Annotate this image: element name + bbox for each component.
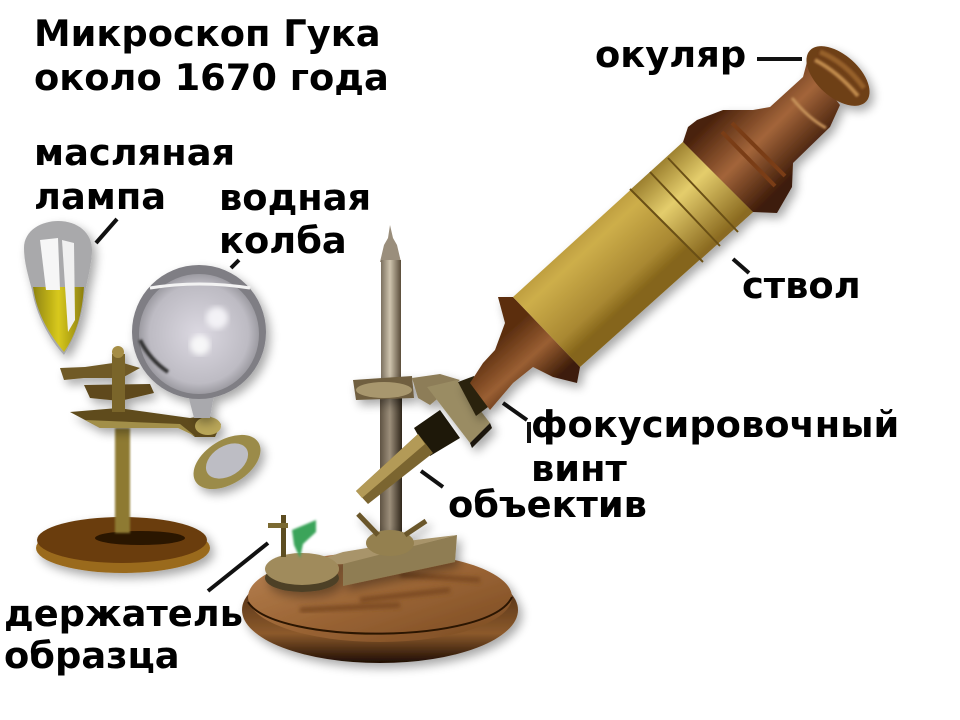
label: water flask: водная: [219, 176, 371, 219]
microscope: [242, 35, 880, 663]
icon: lamp base: [36, 517, 210, 573]
lamp stand with lamp, flask and lens: [24, 221, 270, 573]
label: focusing screw: фокусировочный: [531, 403, 899, 446]
label: eyepiece: окуляр: [595, 33, 746, 76]
label: oil lamp: масляная: [34, 131, 235, 174]
label: oil lamp: лампа: [34, 175, 166, 218]
icon: lamp post: [115, 428, 130, 533]
leader lines: [96, 59, 802, 591]
label: focusing screw: винт: [531, 447, 627, 490]
icon: specimen holder: [268, 515, 316, 558]
icon: lamp arm: [60, 346, 221, 437]
title: Микроскоп Гука: [34, 12, 381, 55]
label: specimen holder: образца: [4, 634, 180, 677]
label: objective: объектив: [448, 483, 647, 526]
icon: water flask: [132, 265, 266, 418]
icon: pillar: [380, 225, 402, 534]
label: water flask: колба: [219, 219, 347, 262]
label: barrel: ствол: [742, 264, 861, 307]
icon: oil lamp: [24, 221, 92, 355]
icon: body tube: [458, 35, 880, 416]
icon: condenser lens: [184, 424, 270, 500]
icon: brass platform: [265, 514, 457, 592]
icon: objective: [356, 410, 460, 504]
label: specimen holder: держатель: [4, 592, 243, 635]
icon: clamp ring: [353, 374, 492, 448]
icon: wooden base: [242, 552, 518, 663]
title: около 1670 года: [34, 56, 389, 99]
